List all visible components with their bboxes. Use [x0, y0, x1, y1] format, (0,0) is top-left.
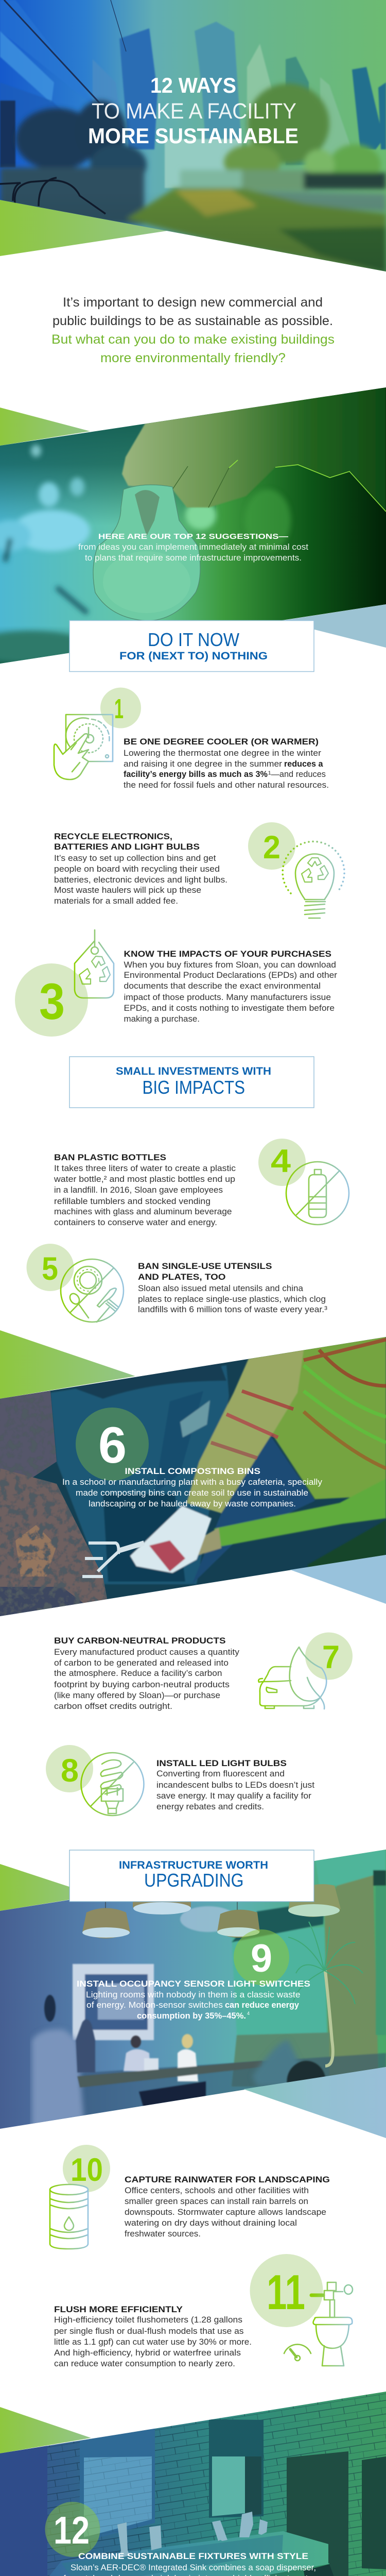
text block 11: High-efficiency toilet flushometers (1.28 gallons	[54, 2315, 242, 2325]
text block 1: BE ONE DEGREE COOLER (OR WARMER)	[124, 737, 319, 747]
decorative green wedge under hero	[0, 200, 167, 256]
text block 6: INSTALL COMPOSTING BINS	[125, 1467, 260, 1476]
text block 10: watering on dry days without draining local	[124, 2218, 297, 2228]
text block 10: downspouts. Stormwater capture allows landscape	[125, 2208, 326, 2217]
icon: no disposable plates	[61, 1259, 124, 1322]
text block 9: of energy. Motion-sensor switches	[86, 2001, 223, 2010]
text block 4: containers to conserve water and energy.	[54, 1218, 217, 1227]
text block 4: machines with glass and aluminum beverage	[54, 1207, 232, 1216]
intro text: more environmentally friendly?	[100, 351, 286, 365]
text block 9: Lighting rooms with nobody in them is a classic waste	[86, 1990, 301, 1999]
text block 4: BAN PLASTIC BOTTLES	[54, 1153, 166, 1162]
number badge 2	[248, 822, 295, 870]
text block 8: save energy. It may qualify a facility for	[156, 1791, 312, 1801]
title: TO MAKE A FACILITY	[92, 99, 296, 124]
section banner: infrastructure: INFRASTRUCTURE WORTH	[119, 1859, 268, 1871]
bulb photo caption: to plans that require some infrastructure improvements.	[85, 553, 302, 563]
text block 1: the need for fossil fuels and other natural resources.	[124, 781, 329, 790]
text block 8: INSTALL LED LIGHT BULBS	[156, 1759, 287, 1768]
text block 2: RECYCLE ELECTRONICS,	[54, 832, 172, 841]
text block 9: can reduce energy	[225, 2001, 300, 2010]
number badge 9	[234, 1929, 289, 1985]
text block 3: When you buy fixtures from Sloan, you can download	[124, 960, 336, 970]
item 7: carbon neutral	[54, 1632, 353, 1711]
hero photo: city skyline with blue-green overlay	[0, 0, 386, 273]
intro text: It’s important to design new commercial and	[63, 295, 323, 310]
text block 5	[138, 1262, 328, 1314]
intro text: public buildings to be as sustainable as possible.	[52, 314, 333, 328]
item 1: thermostat	[54, 687, 329, 790]
text block 7: of carbon to be generated and released into	[54, 1658, 229, 1668]
text block 9: 4	[247, 2011, 250, 2016]
item 4: plastic bottles	[54, 1139, 349, 1227]
text block 4: It takes three liters of water to create a plastic	[54, 1164, 236, 1173]
text block 8: Converting from fluorescent and	[156, 1769, 285, 1778]
number badge 3	[15, 963, 88, 1037]
leaf litter	[0, 1391, 111, 1618]
text block 1: and raising it one degree in the summer	[124, 759, 283, 769]
text block 8: energy rebates and credits.	[156, 1802, 264, 1811]
number badge 1: 1	[114, 693, 124, 724]
title: MORE SUSTAINABLE	[88, 124, 299, 148]
text block 7	[54, 1636, 240, 1711]
photo: office meeting room	[0, 1847, 386, 2133]
text block 2: Most waste haulers will pick up these	[54, 886, 201, 895]
text block 2: It’s easy to set up collection bins and get	[54, 854, 216, 863]
text block 10: Office centers, schools and other facilities with	[125, 2186, 309, 2195]
text block 7: (like many offered by Sloan)—or purchase	[54, 1691, 220, 1700]
decorative green wedge above office photo	[0, 1864, 96, 1911]
number badge 5	[27, 1244, 74, 1291]
icon: rain barrel	[50, 2184, 88, 2249]
number badge 7: 7	[322, 1639, 340, 1675]
text block 6: In a school or manufacturing plant with a busy cafeteria, specially	[62, 1478, 323, 1487]
text block 8: incandescent bulbs to LEDs doesn’t just	[156, 1781, 314, 1790]
number badge 4: 4	[271, 1143, 291, 1179]
bulb photo caption: HERE ARE OUR TOP 12 SUGGESTIONS—	[98, 533, 289, 541]
text block 3: EPDs, and it costs nothing to investigate them before	[124, 1004, 335, 1013]
text block 9: INSTALL OCCUPANCY SENSOR LIGHT SWITCHES	[77, 1979, 310, 1989]
stall partitions	[287, 2451, 348, 2576]
number badge 11: 11	[267, 2265, 305, 2320]
icon: hand on thermostat	[54, 715, 113, 779]
text block 10: freshwater sources.	[125, 2229, 201, 2239]
title: 12 WAYS	[150, 73, 236, 97]
text block 11: And high-efficiency, hybrid or waterfree urinals	[54, 2348, 241, 2358]
decorative blue wedge below office photo	[243, 2067, 386, 2138]
decorative green wedge above compost photo	[0, 1330, 135, 1399]
number badge 6	[76, 1408, 149, 1481]
text block 4: refillable tumblers and stocked vending	[54, 1197, 210, 1206]
icon: car and leaf	[258, 1647, 326, 1709]
section banner: small investments: SMALL INVESTMENTS WITH	[116, 1065, 271, 1077]
text block 5: Sloan also issued metal utensils and china	[138, 1284, 304, 1293]
text block 12	[63, 2552, 323, 2576]
text block 4: water bottle,² and most plastic bottles end up	[54, 1175, 235, 1184]
text block 3: impact of those products. Many manufacturers issue	[124, 993, 331, 1002]
icon: no plastic bottle	[286, 1162, 349, 1225]
text block 1: ¹—and reduces	[268, 770, 326, 779]
icon: recycling price tag	[75, 930, 114, 998]
number badge 8: 8	[61, 1753, 79, 1789]
decorative blue wedge	[280, 604, 386, 648]
icon: recycling light bulb	[283, 841, 344, 918]
decorative green wedge above bulb photo	[0, 408, 90, 446]
decorative blue wedge below compost photo	[290, 1555, 386, 1604]
section banner: infrastructure	[69, 1850, 314, 1902]
text block 6: landscaping or be hauled away by waste companies.	[89, 1499, 296, 1509]
text block 3: documents that describe the exact environmental	[124, 981, 321, 991]
text block 10: smaller green spaces can install rain barrels on	[125, 2197, 308, 2206]
title	[88, 73, 299, 148]
icon: no fluorescent bulb	[81, 1753, 144, 1816]
decorative green wedge above restroom photo	[0, 2407, 91, 2453]
text block 3	[124, 950, 338, 1024]
number badge 2: 2	[263, 829, 280, 866]
text block 7: the atmosphere. Reduce a facility’s carbon	[54, 1669, 222, 1678]
text block 11: little as 1.1 gpf) can cut water use by 30% or more.	[54, 2337, 252, 2347]
item 9 over photo	[77, 1929, 310, 2021]
text block 1: Lowering the thermostat one degree in the winter	[124, 749, 322, 758]
text block 3: Environmental Product Declarations (EPDs) and other	[124, 971, 338, 980]
text block 11: can reduce water consumption to nearly zero.	[54, 2359, 235, 2368]
text block 11: FLUSH MORE EFFICIENTLY	[54, 2305, 183, 2314]
photo: compost bin and gardener	[0, 1324, 386, 1618]
number badge 5: 5	[42, 1251, 58, 1287]
text block 5: AND PLATES, TOO	[138, 1273, 226, 1282]
bulb photo caption: from ideas you can implement immediately at minimal cost	[78, 543, 308, 552]
text block 7: BUY CARBON-NEUTRAL PRODUCTS	[54, 1636, 225, 1646]
text block 11: per single flush or dual-flush models that use as	[54, 2327, 243, 2336]
text block 12: Sloan’s AER-DEC® Integrated Sink combines a soap dispenser,	[71, 2563, 316, 2572]
mirrors	[80, 2419, 264, 2543]
number badge 12: 12	[54, 2509, 90, 2552]
number badge 11	[250, 2254, 323, 2327]
text block 9	[77, 1979, 310, 2021]
text block 2	[54, 832, 227, 906]
photo: hand holding light bulb	[0, 386, 386, 665]
text block 2: BATTERIES AND LIGHT BULBS	[54, 842, 200, 852]
text block 1	[124, 737, 329, 790]
people and table	[32, 1995, 326, 2133]
section banner: do it now	[69, 620, 314, 672]
text block 5: landfills with 6 million tons of waste every year.³	[138, 1305, 328, 1314]
number badge 12	[45, 2502, 100, 2557]
section banner: small investments	[69, 1057, 314, 1108]
text block 5: BAN SINGLE-USE UTENSILS	[138, 1262, 272, 1271]
text block 1: reduces a	[284, 759, 323, 769]
number badge 6: 6	[98, 1416, 127, 1473]
chrome faucets	[117, 2512, 268, 2558]
intro text	[51, 295, 335, 365]
intro text: But what can you do to make existing buildings	[51, 332, 335, 347]
text block 2: people on board with recycling their used	[54, 865, 220, 874]
text block 1: facility’s energy bills as much as 3%	[124, 770, 268, 779]
text block 11	[54, 2305, 252, 2368]
text block 6: made composting bins can create soil to use in sustainable	[76, 1488, 308, 1498]
text block 7: carbon offset credits outright.	[54, 1702, 172, 1711]
item 5: single-use utensils	[27, 1244, 328, 1322]
text block 10	[124, 2175, 330, 2239]
section banner: small investments: BIG IMPACTS	[142, 1077, 245, 1098]
text block 8	[156, 1759, 314, 1811]
section banner: do it now: DO IT NOW	[148, 629, 239, 650]
item 8: LED bulbs	[46, 1745, 314, 1816]
text block 3: making a purchase.	[124, 1014, 200, 1024]
item 10: rainwater	[50, 2145, 330, 2249]
item 2: recycle electronics	[54, 822, 344, 918]
text block 10: CAPTURE RAINWATER FOR LANDSCAPING	[125, 2175, 330, 2184]
text block 12: COMBINE SUSTAINABLE FIXTURES WITH STYLE	[78, 2552, 308, 2561]
text block 6	[62, 1467, 323, 1509]
text block 5: plates to replace single-use plastics, which clog	[138, 1295, 326, 1304]
text block 7: Every manufactured product causes a quantity	[54, 1648, 240, 1657]
pendant lamps	[82, 1884, 341, 1938]
text block 4: in a landfill. In 2016, Sloan gave employees	[54, 1185, 223, 1195]
icon: toilet with flushometer and gauge	[284, 2282, 353, 2366]
number badge 7	[305, 1632, 353, 1680]
item 12 over photo	[45, 2502, 323, 2576]
plant	[288, 1922, 363, 2066]
text block 3: KNOW THE IMPACTS OF YOUR PURCHASES	[124, 950, 331, 959]
item 6 over photo	[62, 1408, 323, 1509]
number badge 10	[63, 2145, 110, 2192]
section banner: do it now: FOR (NEXT TO) NOTHING	[119, 650, 268, 662]
number badge 1	[100, 687, 141, 728]
text block 7: footprint by buying carbon-neutral products	[54, 1680, 230, 1689]
section banner: infrastructure: UPGRADING	[144, 1870, 244, 1891]
number badge 10: 10	[71, 2152, 103, 2188]
bulb photo caption	[78, 533, 308, 563]
number badge 3: 3	[39, 973, 65, 1030]
item 3: purchases	[15, 930, 338, 1037]
number badge 9: 9	[251, 1937, 272, 1980]
item 11: flush	[54, 2254, 353, 2368]
text block 2: materials for a small added fee.	[54, 896, 178, 906]
number badge 4	[258, 1139, 306, 1186]
number badge 8	[46, 1745, 93, 1792]
text block 9: consumption by 35%–45%.	[137, 2011, 246, 2021]
text block 4	[54, 1153, 236, 1227]
text block 2: batteries, electronic devices and light bulbs.	[54, 875, 227, 885]
trough sink	[38, 2531, 328, 2576]
photo: restroom with integrated sink	[0, 2391, 386, 2576]
